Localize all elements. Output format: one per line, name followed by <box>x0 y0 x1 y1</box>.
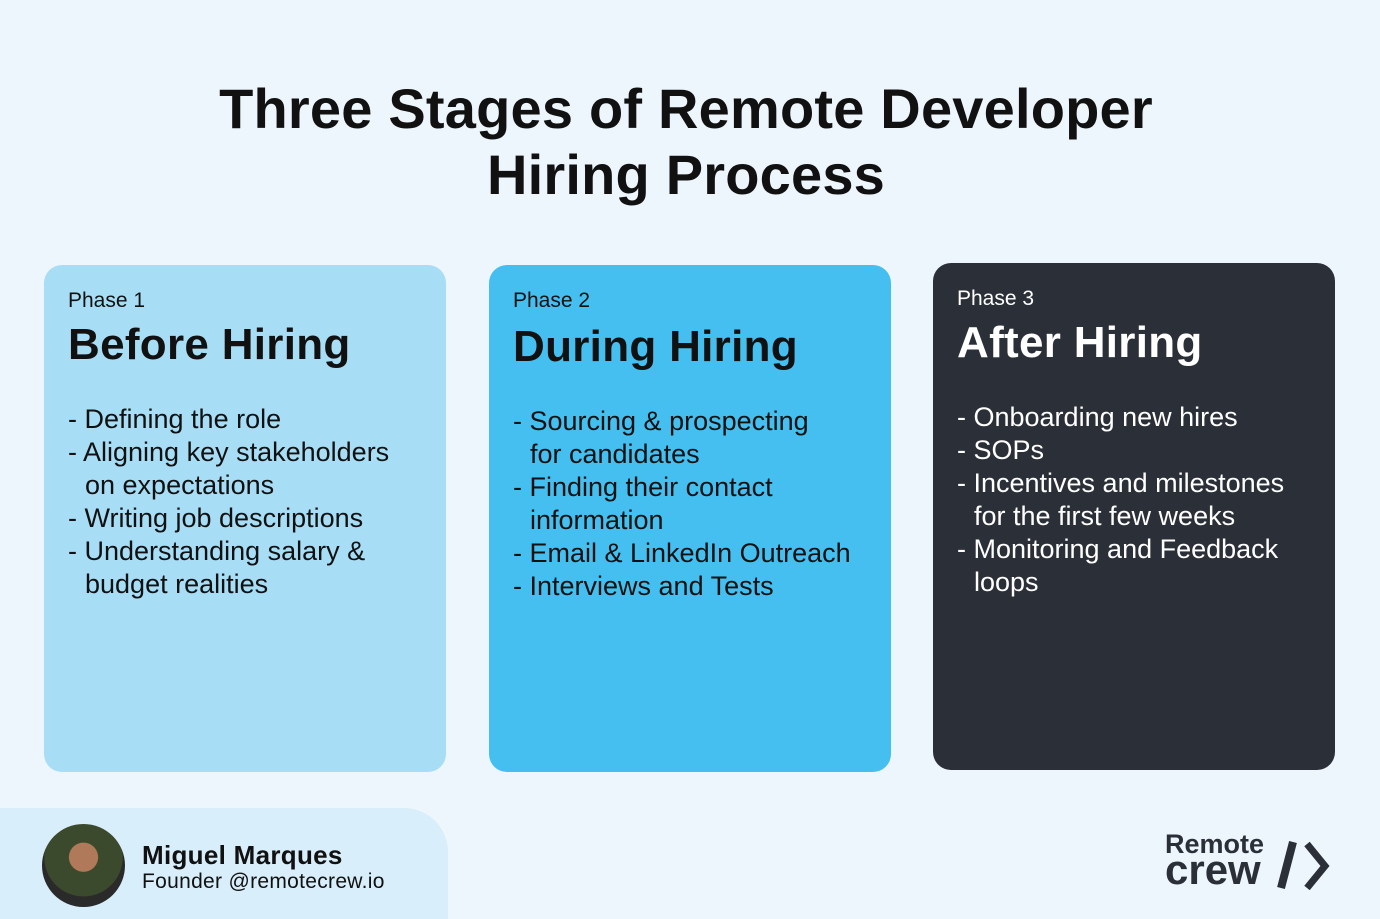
phase label 1: Phase 1 <box>68 289 145 312</box>
list: phase 3 tasks: - SOPs <box>957 435 1044 465</box>
list: phase 2 tasks: - Sourcing & prospecting <box>513 406 809 436</box>
list: phase 2 tasks: - Finding their contact information <box>513 472 773 535</box>
title: Hiring Process <box>487 143 885 206</box>
list: phase 3 tasks: - Monitoring and Feedback loops <box>957 534 1278 597</box>
icon: avatar <box>42 824 125 907</box>
list: phase 2 tasks <box>513 406 851 601</box>
list: phase 2 tasks: for candidates <box>530 439 700 469</box>
list: phase 1 tasks: - Defining the role <box>68 404 281 434</box>
title: Three Stages of Remote Developer <box>219 77 1153 140</box>
list: phase 2 tasks: - Interviews and Tests <box>513 571 774 601</box>
heading: before hiring: Before Hiring <box>68 320 351 369</box>
author role: Founder @remotecrew.io <box>142 870 385 893</box>
heading: during hiring: During Hiring <box>513 322 798 371</box>
list: phase 3 tasks: - Onboarding new hires <box>957 402 1238 432</box>
list: phase 3 tasks <box>957 402 1284 597</box>
logo: remote crew: Remote <box>1165 829 1264 859</box>
heading: after hiring: After Hiring <box>957 318 1203 367</box>
phase label 2: Phase 2 <box>513 289 590 312</box>
list: phase 1 tasks: - Writing job descriptions <box>68 503 363 533</box>
list: phase 1 tasks <box>68 404 389 599</box>
logo: remote crew: crew <box>1165 846 1261 893</box>
list: phase 1 tasks: - Understanding salary & budget realities <box>68 536 365 599</box>
author badge <box>0 808 448 919</box>
list: phase 1 tasks: - Aligning key stakeholders on expectations <box>68 437 389 500</box>
panel: phase 2 <box>489 265 891 772</box>
list: phase 2 tasks: - Email & LinkedIn Outreach <box>513 538 851 568</box>
phase label 3: Phase 3 <box>957 287 1034 310</box>
author name: Miguel Marques <box>142 840 343 870</box>
list: phase 3 tasks: - Incentives and milestones for the first few weeks <box>957 468 1284 531</box>
title <box>219 77 1153 206</box>
panel: phase 3 <box>933 263 1335 770</box>
logo: remote crew <box>1165 829 1330 893</box>
panel: phase 1 <box>44 265 446 772</box>
